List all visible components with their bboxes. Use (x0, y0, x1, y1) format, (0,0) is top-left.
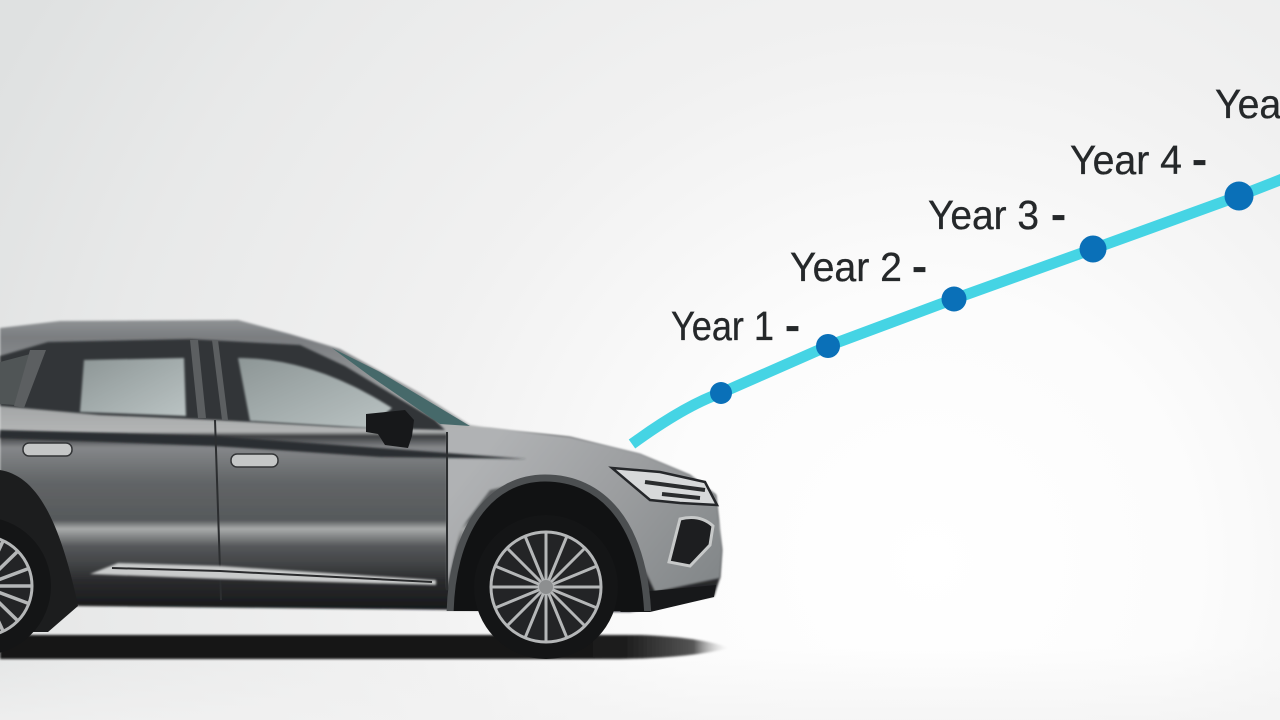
rear wheel (0, 517, 51, 655)
side mirror (366, 410, 414, 448)
door handles (23, 443, 278, 467)
timeline labels: Year 4 (1070, 137, 1182, 183)
timeline curve (632, 178, 1280, 444)
front wheel arch (450, 478, 648, 620)
timeline labels: Year 3 (928, 192, 1039, 238)
rear window (80, 358, 186, 416)
front grille (669, 518, 713, 566)
window surround (0, 339, 445, 430)
headlight (612, 468, 717, 505)
front bumper (620, 585, 716, 612)
timeline labels (671, 81, 1280, 349)
front wheel (474, 515, 618, 659)
car body (0, 320, 722, 612)
timeline labels: - (1051, 191, 1066, 237)
door seams (215, 420, 447, 600)
timeline labels: Year 2 (790, 244, 902, 290)
rear wheel arch (0, 470, 78, 632)
pillars (14, 340, 228, 420)
shoulder crease (0, 430, 527, 459)
timeline labels: Year 1 (671, 303, 774, 349)
timeline labels: - (785, 302, 800, 348)
windshield (332, 348, 470, 426)
timeline labels: - (1192, 136, 1207, 182)
ground shadow (0, 635, 730, 659)
front window (238, 358, 392, 428)
timeline markers (710, 182, 1254, 404)
side sill trim (90, 563, 436, 585)
car (0, 320, 722, 659)
hood and front wing (447, 428, 722, 592)
quarter window (0, 352, 38, 405)
timeline labels: - (912, 243, 927, 289)
